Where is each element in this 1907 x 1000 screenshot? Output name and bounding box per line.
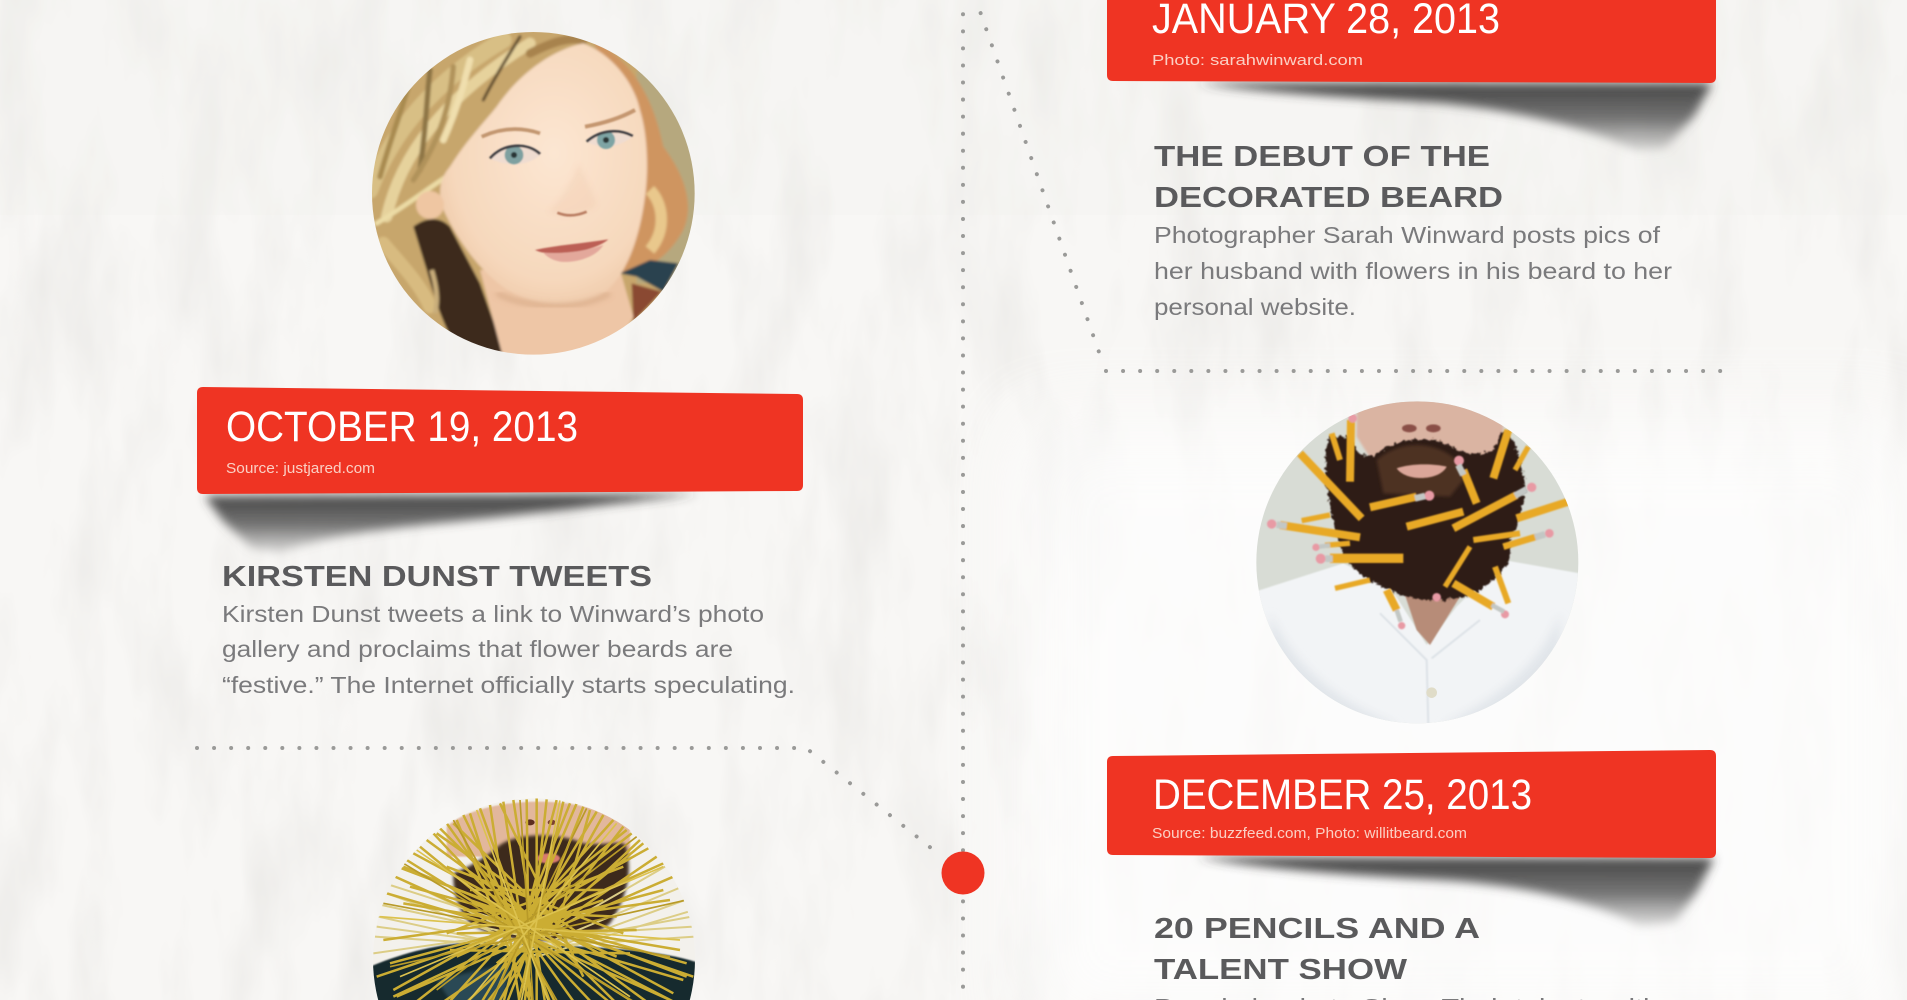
- text block: Kirsten Dunst Tweets: [222, 561, 795, 698]
- ribbon shadow: [1197, 83, 1712, 150]
- photo: beard with pencils: [1250, 400, 1580, 730]
- panel: January 28, 2013: [1107, 0, 1716, 150]
- heading: 20 PENCILS AND A: [1154, 913, 1480, 945]
- dotted connector: January to beard photo: [975, 0, 1100, 355]
- source credit: Source: justjared.com: [226, 460, 375, 477]
- photo: Kirsten Dunst portrait: [370, 30, 703, 360]
- beard mass: [1326, 430, 1525, 600]
- body: “festive.” The Internet officially starts speculating.: [222, 672, 795, 698]
- dotted connector: left column to timeline: [197, 748, 936, 852]
- body: personal website.: [1154, 294, 1356, 320]
- ribbon shadow: [205, 494, 700, 552]
- body: [222, 601, 795, 698]
- panel: December 25, 2013: [1107, 750, 1716, 926]
- ribbon shadow: [1197, 857, 1714, 926]
- panel: October 19, 2013: [197, 387, 803, 552]
- spaghetti strands: [373, 798, 695, 1000]
- heading: DECORATED BEARD: [1154, 182, 1503, 214]
- date: DECEMBER 25, 2013: [1153, 771, 1532, 819]
- dotted divider: right column: [1106, 369, 1723, 373]
- pencils: [1267, 414, 1568, 629]
- timeline node: [942, 852, 984, 894]
- heading: [1154, 141, 1503, 214]
- skin: [1356, 401, 1504, 458]
- text block: The Debut of the Decorated Beard: [1154, 141, 1672, 320]
- body: gallery and proclaims that flower beards are: [222, 636, 733, 662]
- photo: spaghetti beard: [370, 790, 700, 1000]
- red date ribbon: [1107, 0, 1716, 83]
- heading: [1154, 913, 1480, 986]
- shirt: [1250, 560, 1580, 730]
- date: OCTOBER 19, 2013: [226, 403, 578, 451]
- heading: TALENT SHOW: [1154, 954, 1408, 986]
- body: her husband with flowers in his beard to her: [1154, 258, 1672, 284]
- body: Photographer Sarah Winward posts pics of: [1154, 222, 1661, 248]
- pencil tips: [1267, 414, 1554, 629]
- text block: 20 Pencils and a Talent Show: [1154, 913, 1659, 1000]
- body: [1154, 222, 1672, 320]
- source credit: Source: buzzfeed.com, Photo: willitbeard.com: [1152, 825, 1467, 842]
- heading: THE DEBUT OF THE: [1154, 141, 1490, 173]
- body: Kirsten Dunst tweets a link to Winward’s photo: [222, 601, 764, 627]
- red date ribbon: [1107, 750, 1716, 858]
- dotted timeline spine: [961, 0, 965, 1000]
- heading: KIRSTEN DUNST TWEETS: [222, 561, 652, 593]
- photo credit: Photo: sarahwinward.com: [1152, 52, 1363, 69]
- red date ribbon: [197, 387, 803, 494]
